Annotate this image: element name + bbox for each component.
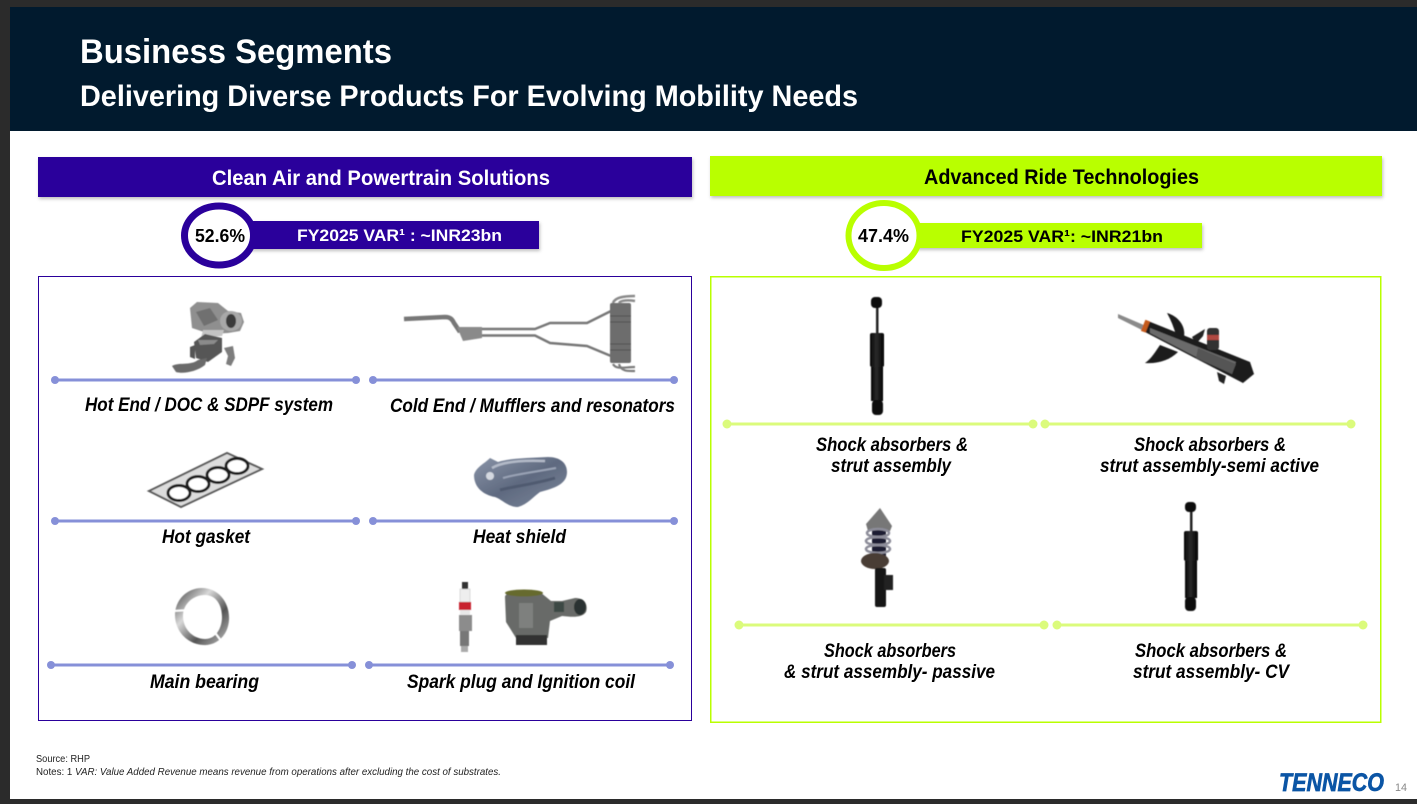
label: shock absorber: Shock absorbers &	[816, 435, 968, 456]
label: passive	[784, 641, 995, 683]
divider: semi-active	[1040, 420, 1356, 428]
metric: clean air share and VAR: 52.6%	[195, 226, 245, 246]
icon: CV shock absorber	[1184, 502, 1198, 611]
label: heat shield: Heat shield	[473, 527, 566, 548]
divider: cold end	[369, 376, 678, 384]
footnote: Notes: 1 VAR: Value Added Revenue means revenue from operations after excluding the cost of substrates.	[36, 767, 501, 778]
metric: advanced ride share and VAR: FY2025 VAR¹: ~INR21bn	[961, 227, 1163, 246]
segment heading: clean air and powertrain solutions	[38, 157, 692, 197]
label: shock absorber: strut assembly	[831, 456, 952, 477]
metric: advanced ride share and VAR	[848, 203, 1202, 268]
label: passive: & strut assembly- passive	[784, 662, 995, 683]
label: main bearing: Main bearing	[150, 672, 259, 693]
page number: 14	[1395, 782, 1407, 794]
label: semi-active	[1100, 435, 1319, 477]
icon: shock absorber	[870, 297, 884, 415]
logo: Tenneco: TENNECO	[1279, 769, 1384, 797]
label: hot end: Hot End / DOC & SDPF system	[85, 395, 333, 416]
source note: Source: RHP	[36, 754, 90, 765]
icon: semi-active strut	[1118, 313, 1254, 384]
icon: passive strut with spring	[861, 508, 893, 607]
label: shock absorber	[816, 435, 968, 477]
divider: heat shield	[369, 517, 678, 525]
divider: spark plug	[365, 661, 674, 669]
label: passive: Shock absorbers	[824, 641, 956, 662]
icon: hot end turbo and DOC	[172, 302, 244, 373]
divider: CV	[1052, 620, 1368, 630]
metric: clean air share and VAR	[184, 206, 539, 265]
divider: hot gasket	[51, 517, 360, 525]
divider: hot end	[51, 376, 360, 384]
panel: clean air products	[38, 276, 692, 720]
segment heading: advanced ride technologies	[710, 156, 1382, 196]
segment heading: advanced ride technologies: Advanced Ride Technologies	[924, 165, 1199, 189]
label: CV	[1133, 641, 1290, 683]
segment heading: clean air and powertrain solutions: Clean Air and Powertrain Solutions	[212, 166, 550, 190]
divider: main bearing	[47, 661, 356, 669]
metric: clean air share and VAR: FY2025 VAR¹ : ~INR23bn	[297, 226, 502, 245]
label: semi-active: strut assembly-semi active	[1100, 456, 1319, 477]
subtitle: Delivering Diverse Products For Evolving Mobility Needs	[80, 80, 858, 113]
label: hot gasket: Hot gasket	[162, 527, 251, 548]
title: Business Segments	[80, 33, 392, 71]
divider: passive	[734, 620, 1048, 630]
icon: heat shield	[474, 457, 567, 507]
icon: ignition coil	[505, 590, 587, 645]
divider: shock absorber	[722, 420, 1038, 428]
header band	[10, 7, 1417, 131]
label: CV: Shock absorbers &	[1135, 641, 1287, 662]
icon: hot gasket	[149, 453, 262, 507]
metric: advanced ride share and VAR: 47.4%	[858, 226, 909, 246]
icon: main bearing	[173, 588, 229, 645]
icon: spark plug	[459, 582, 472, 652]
label: semi-active: Shock absorbers &	[1134, 435, 1286, 456]
label: CV: strut assembly- CV	[1133, 662, 1290, 683]
panel: advanced ride products	[711, 277, 1381, 722]
label: spark plug: Spark plug and Ignition coil	[407, 672, 636, 693]
label: cold end: Cold End / Mufflers and resonators	[390, 396, 675, 417]
icon: cold end muffler system	[404, 296, 635, 371]
